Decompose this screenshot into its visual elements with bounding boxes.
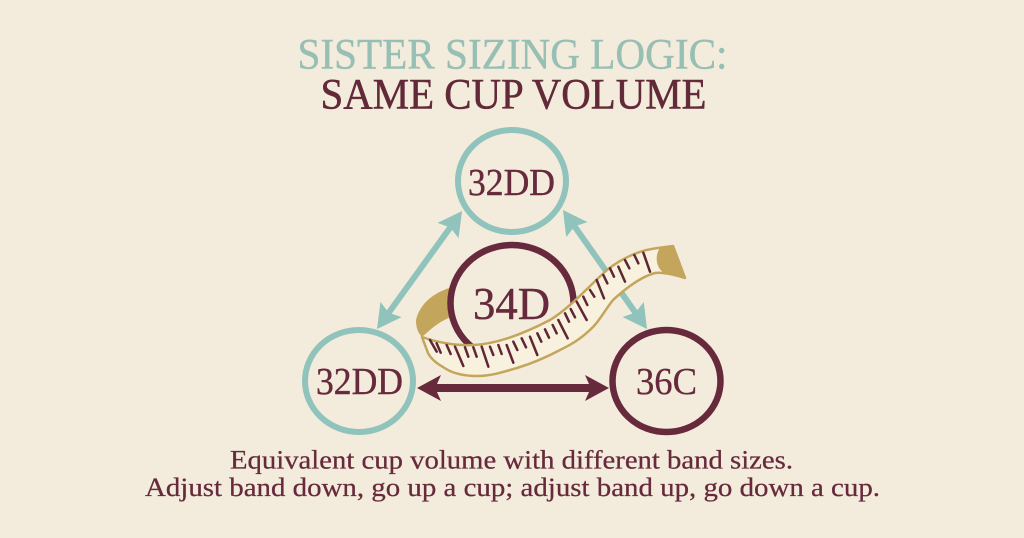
tape body bbox=[422, 246, 685, 376]
circle: bottom-left 32DD: 32DD bbox=[316, 361, 403, 403]
title line 1: SISTER SIZING LOGIC: bbox=[298, 32, 728, 78]
arrow: top to bottom-right bbox=[552, 203, 658, 337]
title bbox=[298, 32, 728, 118]
circle: top 32DD bbox=[458, 130, 566, 232]
circle: bottom-right 36C bbox=[612, 330, 720, 432]
tape measure bbox=[422, 246, 685, 376]
caption line 2: Adjust band down, go up a cup; adjust band up, go down a cup. bbox=[145, 473, 880, 502]
title line 2: SAME CUP VOLUME bbox=[320, 72, 706, 118]
tape ticks bbox=[430, 253, 650, 367]
caption bbox=[145, 446, 880, 502]
arrow: bottom-left to bottom-right bbox=[417, 375, 609, 401]
circle: bottom-left 32DD bbox=[305, 330, 413, 432]
tape measure: back end bbox=[416, 288, 451, 337]
circle: top 32DD: 32DD bbox=[468, 162, 555, 204]
circle: center 34D: 34D bbox=[473, 278, 550, 329]
circle: center 34D bbox=[450, 245, 574, 361]
circle: bottom-right 36C: 36C bbox=[636, 361, 697, 403]
tape gold tip bbox=[657, 246, 685, 278]
caption line 1: Equivalent cup volume with different band sizes. bbox=[230, 446, 793, 474]
arrow: top to bottom-left bbox=[366, 203, 473, 337]
